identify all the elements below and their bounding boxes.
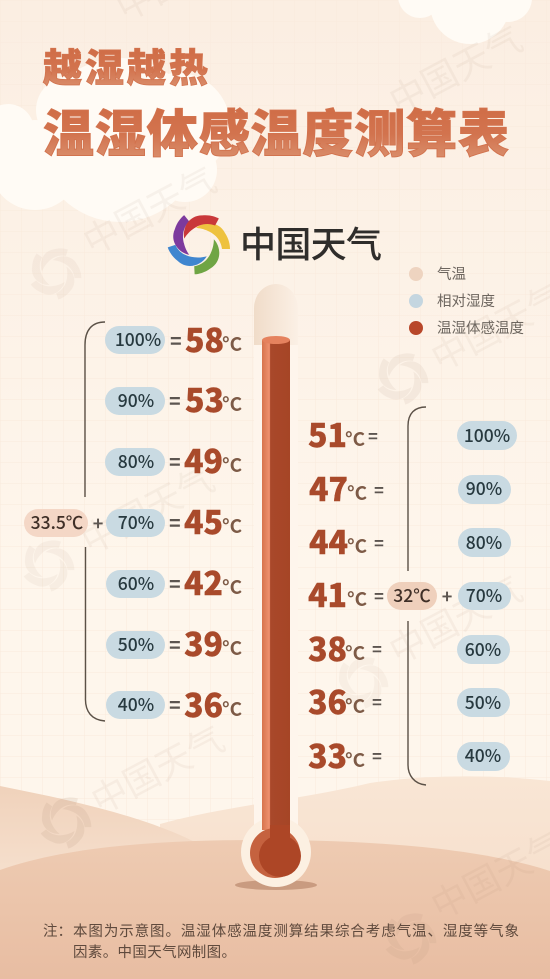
row 80% [105, 437, 242, 483]
right panel: 32C readings [308, 411, 517, 778]
row 70%: = [169, 513, 181, 535]
row 38: °C [345, 639, 365, 666]
row 38: 38 [308, 625, 347, 671]
row 40%: 40% [118, 692, 154, 717]
row 51: 100% [464, 423, 510, 448]
watermarks: 中国天气 [71, 451, 222, 565]
row 70%: °C [222, 512, 242, 539]
thermometer mercury column [262, 340, 290, 830]
left panel: 33.5C readings [24, 316, 242, 727]
row 100%: = [170, 331, 182, 353]
row 80%: °C [222, 451, 242, 478]
row 40%: = [169, 695, 181, 717]
watermarks: 中国天气 [81, 711, 232, 825]
thermometer bulb [250, 825, 301, 878]
ground [0, 840, 550, 979]
row 80%: = [169, 452, 181, 474]
row 33: 40% [465, 743, 501, 768]
row 60%: 60% [118, 571, 154, 596]
row 40% [106, 681, 242, 727]
air temperature pill [387, 582, 437, 610]
footnote [43, 920, 519, 962]
row 70%: 70% [118, 510, 154, 535]
row 41: 41 [308, 571, 347, 617]
row 60% [106, 559, 242, 605]
row 44 [309, 518, 511, 564]
row 50%: = [169, 635, 181, 657]
row 33 [308, 732, 510, 778]
row 90%: °C [222, 390, 242, 417]
row 51: 51 [308, 411, 347, 457]
row 41: = [374, 587, 384, 606]
row 41: °C [347, 585, 367, 612]
row 51: = [368, 427, 378, 446]
row 33: 33 [308, 732, 347, 778]
background clouds [0, 0, 532, 222]
row 50%: 39 [184, 620, 223, 666]
right bracket [408, 407, 426, 785]
row 40%: °C [222, 695, 242, 722]
watermarks: 中国天气 [379, 561, 530, 675]
row 100%: °C [222, 330, 242, 357]
plus: + [442, 583, 452, 609]
left bracket [85, 322, 105, 721]
row 70%: 45 [184, 498, 223, 544]
row 36: 50% [465, 690, 501, 715]
thermometer [235, 284, 317, 890]
row 36: = [372, 693, 382, 712]
row 50% [106, 620, 242, 666]
footnote: 因素。中国天气网制图。 [73, 941, 236, 962]
row 100%: 100% [115, 327, 161, 352]
logo [164, 206, 382, 274]
row 80%: 80% [118, 449, 154, 474]
row 38 [308, 625, 510, 671]
row 70% [106, 498, 242, 544]
row 40%: 36 [184, 681, 223, 727]
hill: back left [0, 786, 195, 900]
row 47: 47 [309, 465, 348, 511]
row 47 [309, 465, 511, 511]
footnote: 本图为示意图。温湿体感温度测算结果综合考虑气温、湿度等气象 [73, 920, 519, 941]
thermometer shadow [235, 880, 317, 890]
row 100% [105, 316, 242, 362]
row 100%: 58 [185, 316, 224, 362]
row 60%: °C [222, 573, 242, 600]
air temperature pill: 33.5℃ [31, 510, 83, 535]
legend: air temperature: 气温 [437, 263, 466, 284]
row 90%: 53 [185, 376, 224, 422]
row 41 [308, 571, 511, 617]
row 33: °C [345, 746, 365, 773]
footnote: 注： [43, 920, 72, 941]
title: subtitle: 越湿越热 [43, 38, 208, 94]
row 80%: 49 [184, 437, 223, 483]
row 36: 36 [308, 678, 347, 724]
row 33: = [372, 747, 382, 766]
legend [409, 263, 524, 338]
row 36: °C [345, 692, 365, 719]
row 44: 80% [466, 530, 502, 555]
row 44: = [374, 534, 384, 553]
row 90%: 90% [118, 388, 154, 413]
row 51 [308, 411, 517, 457]
legend: felt temperature: 温湿体感温度 [437, 317, 524, 338]
row 44: °C [347, 532, 367, 559]
row 36 [308, 678, 510, 724]
legend: relative humidity: 相对湿度 [437, 290, 495, 311]
row 50%: °C [222, 634, 242, 661]
row 90% [105, 376, 242, 422]
plus: + [93, 510, 103, 536]
row 41: 70% [466, 583, 502, 608]
row 60%: 42 [184, 559, 223, 605]
row 38: = [372, 640, 382, 659]
air temperature pill: 32℃ [393, 583, 431, 608]
watermarks: 中国天气 [73, 152, 224, 266]
row 50%: 50% [118, 632, 154, 657]
title: main: 温湿体感温度测算表 [43, 93, 509, 167]
hill: back right [160, 776, 550, 900]
logo wordmark: 中国天气 [240, 216, 382, 268]
row 44: 44 [309, 518, 348, 564]
row 90%: = [169, 391, 181, 413]
row 51: °C [345, 425, 365, 452]
row 38: 60% [465, 637, 501, 662]
thermometer bulb casing [241, 817, 311, 887]
icon: colourful swirl [164, 206, 230, 274]
row 47: 90% [466, 476, 502, 501]
row 47: = [374, 481, 384, 500]
row 60%: = [169, 574, 181, 596]
thermometer glass [254, 284, 298, 825]
watermarks: 中国天气 [379, 11, 530, 125]
row 47: °C [347, 479, 367, 506]
